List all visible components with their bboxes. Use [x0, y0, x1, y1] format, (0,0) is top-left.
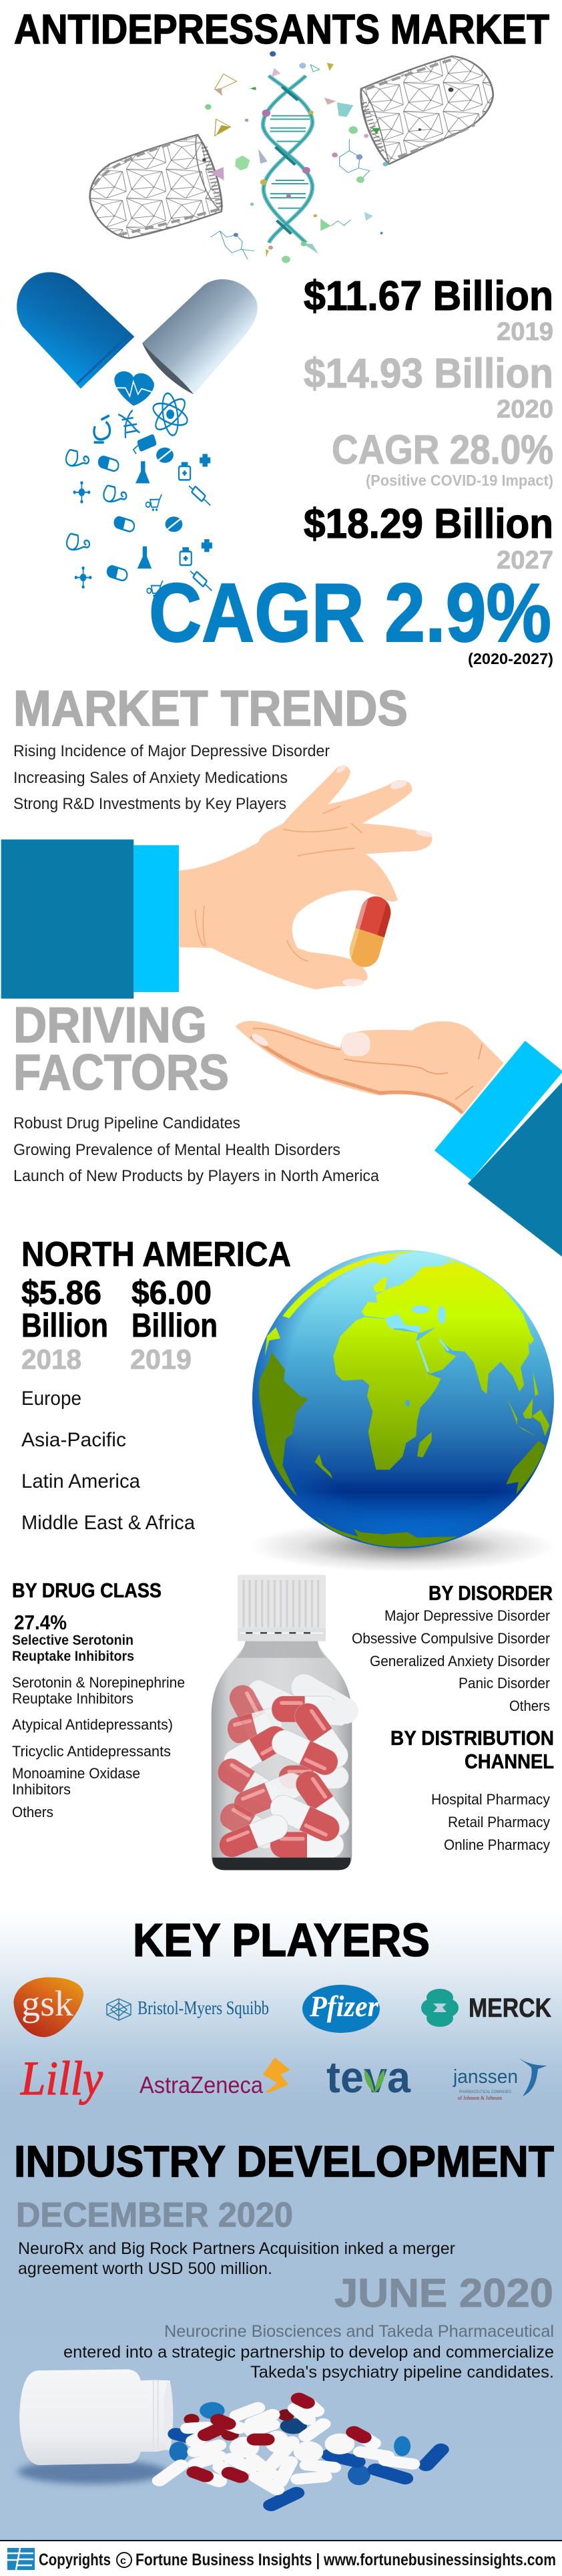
other regions list [21, 1388, 195, 1534]
year label 2027: 2027 [497, 546, 553, 575]
channel list: Retail Pharmacy [448, 1814, 550, 1830]
disorder list: Panic Disorder [459, 1675, 550, 1692]
logo: GSK [13, 1977, 83, 2037]
logo: GSK: gsk [21, 1983, 73, 2024]
driver list: Robust Drug Pipeline Candidates [13, 1114, 240, 1132]
drug class list: Others [12, 1804, 53, 1820]
icon: grey capsule half [142, 279, 258, 394]
figure: 2027 value: $18.29 Billion [304, 501, 553, 547]
continents [265, 1251, 549, 1478]
trend list: Rising Incidence of Major Depressive Disorder [13, 742, 330, 760]
driver list: Launch of New Products by Players in North America [13, 1167, 380, 1185]
icons: repeating medical pictograms [66, 448, 212, 597]
hand [179, 764, 433, 989]
sleeve [1, 840, 179, 999]
disorder list: Others [509, 1698, 550, 1714]
illustration: spilled pills [18, 2370, 441, 2505]
bottle cap [238, 1575, 326, 1641]
heading: by distribution channel [390, 1726, 554, 1773]
logo: Merck [421, 1989, 551, 2027]
icon: blue capsule half [17, 272, 134, 389]
panel: development June 2020 [63, 2271, 554, 2382]
share: 27.4%: 27.4% [14, 1611, 67, 1634]
other regions list: Latin America [21, 1470, 140, 1492]
description: entered into a strategic partnership to develop and commercialize [63, 2343, 554, 2362]
market size figures [149, 273, 553, 667]
bottle body [212, 1641, 352, 1870]
icon: right mesh capsule half [361, 56, 493, 164]
description [18, 2239, 455, 2278]
drug class list: Serotonin & Norepinephrine [12, 1674, 185, 1691]
panel: by disorder [352, 1581, 553, 1714]
channel list [431, 1791, 550, 1853]
channel list: Hospital Pharmacy [431, 1791, 550, 1808]
heading: North America: NORTH AMERICA [21, 1235, 291, 1274]
value: 2018: 2018 [21, 1343, 81, 1375]
illustration: hand holding pill [1, 764, 433, 999]
logos: key players [13, 1977, 551, 2105]
open hand [236, 1021, 503, 1115]
date: December 2020: DECEMBER 2020 [16, 2196, 293, 2235]
panel: development December 2020 [16, 2196, 455, 2278]
figure: 2019 value: $11.67 Billion [304, 273, 553, 319]
copyright text: Copyrights [39, 2551, 111, 2569]
logo: Janssen: PHARMACEUTICAL COMPANIES [459, 2090, 511, 2094]
logo: Janssen [453, 2057, 547, 2101]
driver list [13, 1114, 380, 1185]
icon: microscope [94, 416, 110, 442]
heading: key players: KEY PLAYERS [133, 1914, 430, 1966]
value: 2019: 2019 [130, 1343, 192, 1375]
trend list [13, 742, 330, 813]
footer rule [0, 2540, 562, 2541]
footer [0, 2540, 562, 2570]
white pill bottle [19, 2370, 173, 2465]
logo: Pfizer [302, 1985, 380, 2033]
other regions list: Middle East & Africa [21, 1512, 195, 1534]
logo: AstraZeneca [139, 2059, 288, 2098]
figure: 2020 value: $14.93 Billion [304, 351, 553, 397]
drug class list: Tricyclic Antidepressants [12, 1743, 171, 1760]
logo: Pfizer: Pfizer [309, 1990, 379, 2023]
description: agreement worth USD 500 million. [18, 2259, 272, 2278]
panel: by drug class [12, 1579, 185, 1820]
icon: atom [151, 392, 190, 437]
scattered tablets and capsules [160, 2399, 441, 2505]
trend list: Increasing Sales of Anxiety Medications [13, 769, 288, 787]
logo: Fortune Business Insights [7, 2548, 35, 2570]
southern continents [259, 1351, 545, 1547]
disorder list: Major Depressive Disorder [384, 1607, 550, 1624]
logo: Teva: teva [326, 2052, 411, 2102]
icon: small DNA [118, 410, 139, 438]
globe shadow [249, 1521, 556, 1572]
panel background: key players and development [0, 1911, 562, 2540]
logo: Bristol-Myers Squibb [107, 1998, 269, 2020]
icon: IV bag [133, 434, 157, 454]
value: 2019: $6.00 [131, 1274, 212, 1311]
copyright text: c [120, 2555, 126, 2567]
description: Neurocrine Biosciences and Takeda Pharmaceutical [164, 2322, 554, 2341]
heading: by drug class: BY DRUG CLASS [12, 1579, 162, 1602]
trend list: Strong R&D Investments by Key Players [13, 795, 286, 813]
drug class list [12, 1674, 185, 1820]
seas [385, 1305, 449, 1407]
drug class list: Reuptake Inhibitors [12, 1690, 133, 1707]
drug class list: Atypical Antidepressants) [12, 1716, 173, 1733]
panel: North America [21, 1235, 291, 1534]
description: NeuroRx and Big Rock Partners Acquisition inked a merger [18, 2239, 455, 2258]
note: forecast period: (2020-2027) [468, 650, 553, 667]
heading: driving factors: DRIVING [13, 997, 207, 1053]
description: Takeda's psychiatry pipeline candidates. [250, 2363, 554, 2382]
illustration: mesh capsule and DNA helix [90, 51, 493, 263]
bottle base [212, 1858, 350, 1870]
icon: heart with pulse [111, 371, 154, 406]
logo: Janssen: janssen [453, 2066, 518, 2088]
drug class: SSRIs: Selective Serotonin [12, 1633, 133, 1648]
logo: Bristol-Myers Squibb: Bristol-Myers Squibb [137, 1998, 269, 2019]
cuff [435, 1041, 562, 1180]
particles: scattered molecules and dots [202, 51, 453, 263]
value: 2019 [130, 1274, 218, 1375]
bottle shadow [18, 2460, 167, 2484]
disorder list: Generalized Anxiety Disorder [370, 1653, 550, 1669]
value: 2018: Billion [21, 1307, 108, 1344]
description [63, 2322, 554, 2382]
icon: red and orange pill [346, 893, 394, 971]
capsules in bottle [213, 1669, 363, 1861]
drug class: SSRIs: Reuptake Inhibitors [12, 1649, 134, 1664]
icon: left mesh capsule half [90, 135, 222, 238]
drug class: SSRIs [12, 1633, 134, 1664]
date: June 2020: JUNE 2020 [334, 2271, 553, 2315]
illustration: pill bottle [212, 1575, 363, 1870]
year label 2020: 2020 [497, 395, 553, 424]
other regions list: Europe [21, 1388, 81, 1410]
heading: driving factors: FACTORS [13, 1044, 229, 1100]
other regions list: Asia-Pacific [21, 1429, 126, 1451]
note: positive COVID impact: (Positive COVID-19 Impact) [366, 472, 553, 489]
panel: by distribution channel [390, 1726, 554, 1853]
jacket sleeve [468, 1082, 562, 1257]
disorder list [352, 1607, 550, 1714]
illustration: opened blue capsule with medical icons [17, 272, 258, 597]
year label 2019: 2019 [497, 318, 553, 346]
panel: driving factors [13, 997, 380, 1185]
disorder list: Obsessive Compulsive Disorder [352, 1630, 550, 1647]
heading: driving factors [13, 997, 229, 1100]
panel: market trends [13, 680, 408, 813]
driver list: Growing Prevalence of Mental Health Disorders [13, 1141, 340, 1159]
value: 2019: Billion [131, 1307, 218, 1344]
logo: Lilly: Lilly [20, 2052, 103, 2105]
drug class list: Inhibitors [12, 1781, 71, 1798]
drug class list: Monoamine Oxidase [12, 1765, 140, 1782]
logo: AstraZeneca: AstraZeneca [139, 2072, 263, 2098]
value: 2018: $5.86 [21, 1274, 101, 1311]
illustration: globe [249, 1250, 556, 1572]
logo: Janssen: of Johnson & Johnson [458, 2095, 502, 2101]
globe sphere [252, 1250, 554, 1549]
value: 2018 [21, 1274, 108, 1375]
channel list: Online Pharmacy [444, 1836, 550, 1853]
icon: DNA helix [263, 75, 312, 243]
heading: market trends: MARKET TRENDS [13, 680, 408, 736]
illustration: open palm with sleeve [236, 1021, 562, 1257]
